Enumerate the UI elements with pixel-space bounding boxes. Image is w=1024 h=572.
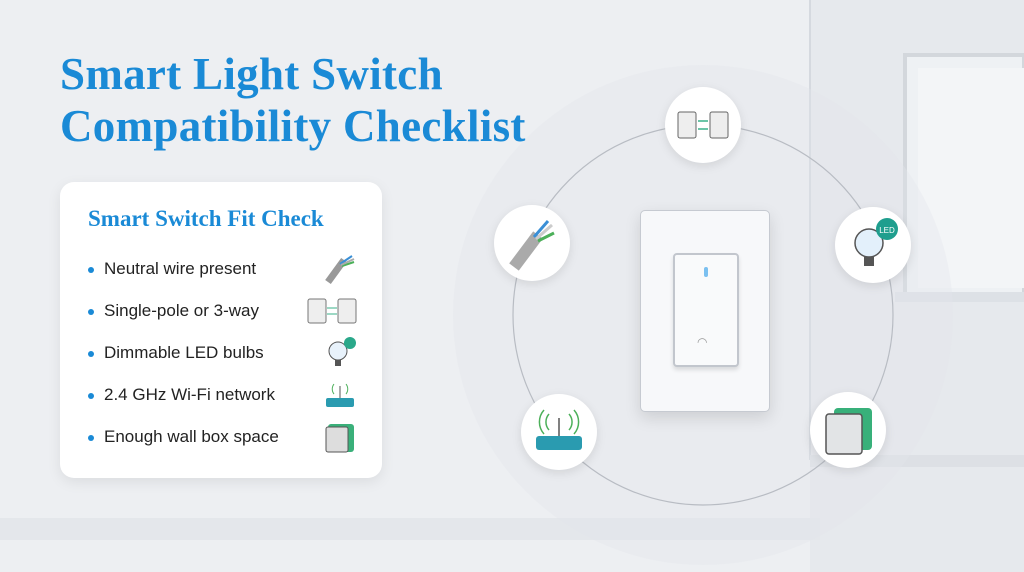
item: single-pole — [88, 298, 356, 324]
title — [60, 49, 526, 151]
icon: wires — [494, 205, 570, 281]
item: LED bulbs: Dimmable LED bulbs — [104, 343, 264, 362]
rocker — [673, 253, 739, 367]
item: wall box — [88, 424, 354, 452]
item: neutral wire: Neutral wire present — [104, 259, 256, 278]
title: Compatibility Checklist — [60, 101, 526, 151]
item: neutral wire — [88, 255, 354, 284]
icon: switches — [665, 87, 741, 163]
icon: router — [521, 394, 597, 470]
item: wall box: Enough wall box space — [104, 427, 279, 446]
card heading: Smart Switch Fit Check — [88, 206, 324, 231]
item: wifi — [88, 384, 354, 407]
panel: fit check card — [60, 182, 382, 478]
item: LED bulbs — [88, 337, 356, 366]
rocker: ◠ — [697, 335, 707, 349]
icon: LED bulb — [835, 207, 911, 283]
title: Smart Light Switch — [60, 49, 443, 99]
icon: wall box — [810, 392, 886, 468]
switch plate — [640, 210, 770, 412]
item: wifi: 2.4 GHz Wi-Fi network — [104, 385, 275, 404]
item: single-pole: Single-pole or 3-way — [104, 301, 259, 320]
icon: LED bulb: LED — [879, 226, 895, 235]
